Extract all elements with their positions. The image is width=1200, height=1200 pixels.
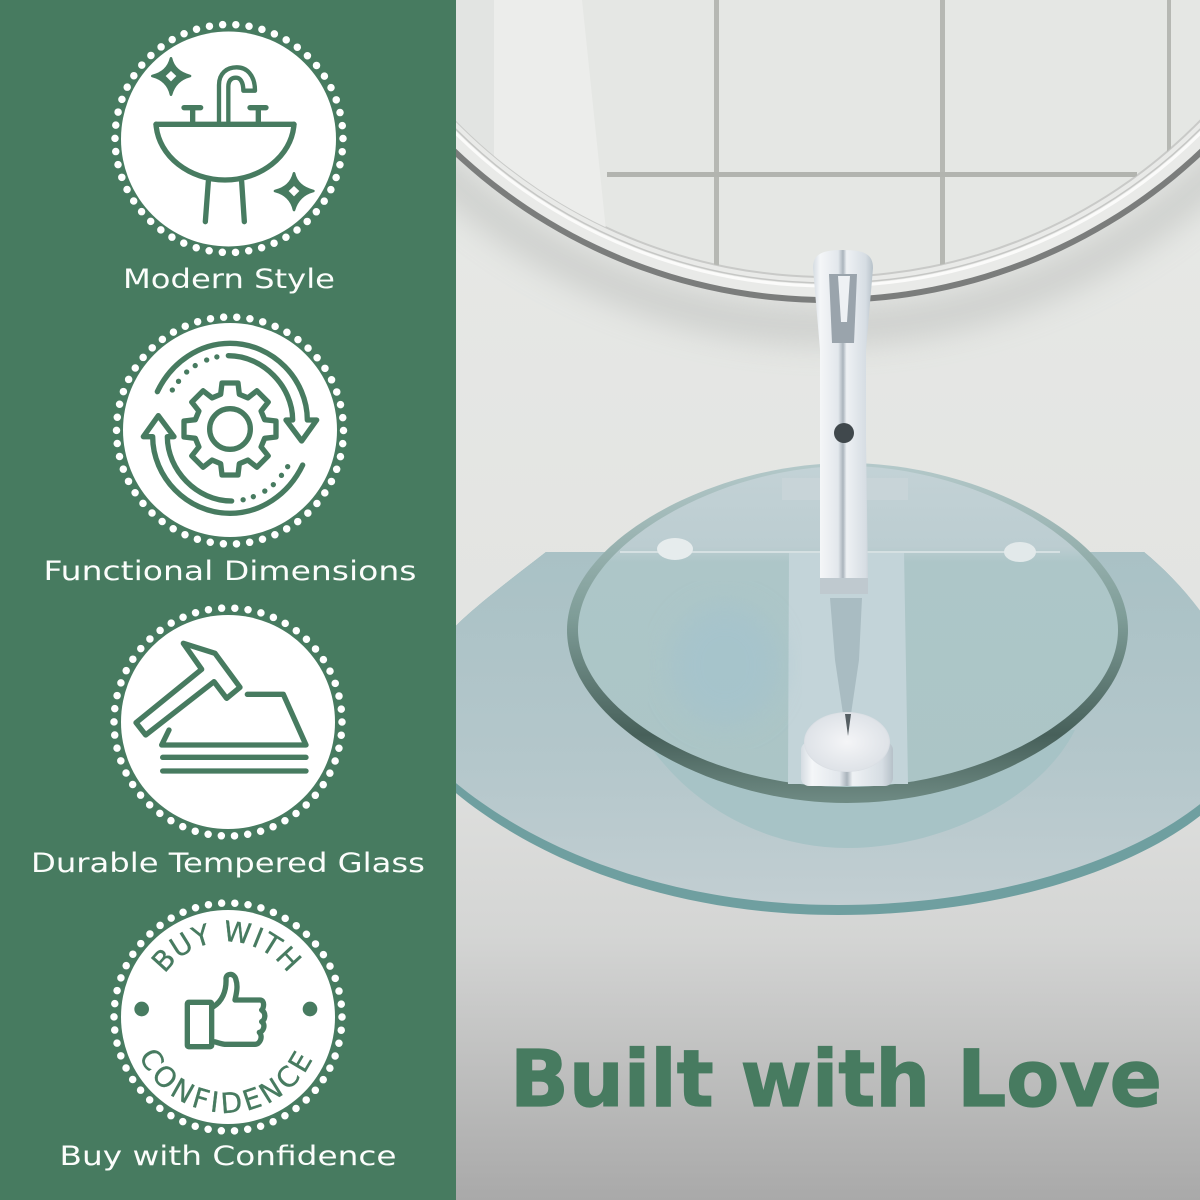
badge: durable tempered glass [31, 608, 425, 879]
round mirror [456, 0, 1200, 303]
dotted ring [114, 903, 342, 1131]
badge: modern style [115, 24, 343, 295]
wall bracket reflection [782, 478, 908, 500]
glass clip right [1004, 542, 1036, 562]
bowl reflection: centre stripe [788, 552, 908, 784]
soft blue patch [670, 605, 780, 725]
faucet [813, 250, 873, 594]
icon: sink with sparkles [152, 58, 313, 222]
drain [801, 712, 893, 786]
bowl reflection: shelf line [620, 551, 1060, 553]
dotted ring [116, 317, 344, 544]
dotted ring [114, 608, 342, 836]
headline: Built with Love [510, 1035, 1162, 1125]
icon: thumbs up seal [134, 920, 318, 1114]
green sidebar panel [0, 0, 456, 1200]
mirror shadow [456, 158, 1200, 351]
glass shelf [400, 552, 1200, 915]
white disc [121, 32, 336, 246]
icon: hammer on glass pane [136, 643, 306, 771]
glass bowl rim [567, 463, 1128, 803]
badge: functional dimensions [44, 317, 416, 587]
bowl underside [640, 730, 1075, 848]
faucet reflection [830, 598, 862, 714]
label: Durable Tempered Glass [31, 848, 425, 879]
glass bowl interior [578, 466, 1118, 787]
white disc [123, 323, 337, 537]
label: Buy with Confidence [60, 1141, 397, 1172]
white disc [121, 615, 335, 829]
label: Functional Dimensions [44, 556, 416, 587]
white disc [121, 910, 335, 1124]
product photo: glass sink and faucet [456, 0, 1200, 1200]
badge: buy with confidence [60, 899, 397, 1172]
dotted ring [115, 24, 343, 252]
label: Modern Style [123, 264, 335, 295]
glass clip left [657, 538, 693, 560]
icon: gear with rotating arrows [143, 343, 317, 513]
icon: thumbs up seal: BUY WITH [150, 920, 302, 972]
icon: thumbs up seal: CONFIDENCE [142, 1050, 312, 1114]
